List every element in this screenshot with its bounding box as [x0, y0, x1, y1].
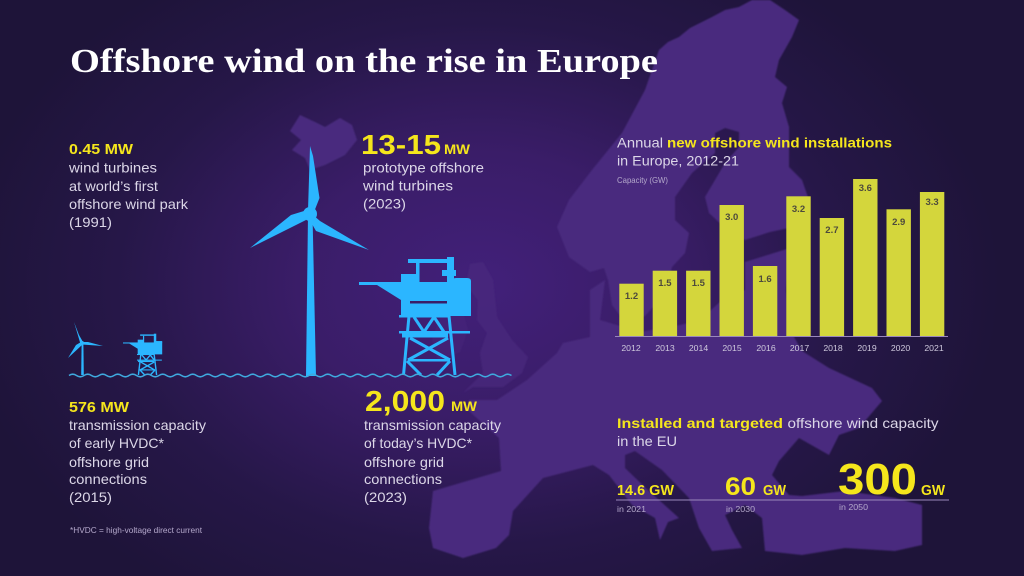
capacity figures: 300	[838, 455, 917, 504]
bar chart: 1.5	[692, 278, 706, 289]
bar chart: 2.7	[825, 225, 839, 236]
text block: 13-15 MW turbines	[361, 129, 484, 212]
icon: small platform	[123, 334, 162, 375]
capacity figures: GW	[763, 483, 786, 499]
capacity heading: offshore wind capacity	[788, 415, 938, 431]
bar chart: 2014	[689, 343, 708, 353]
map of Europe	[290, 0, 922, 558]
text block: 0.45 MW turbines: (1991)	[69, 214, 112, 230]
text block: 13-15 MW turbines: MW	[444, 142, 470, 157]
bar chart	[615, 179, 948, 353]
capacity figures: in 2050	[839, 502, 868, 512]
capacity heading: Installed and targeted	[617, 415, 783, 431]
text block: 576 MW: connections	[69, 471, 147, 487]
capacity figures: in 2021	[617, 504, 646, 514]
bar chart: 2018	[823, 343, 843, 353]
capacity heading: in the EU	[617, 433, 677, 449]
text block: 576 MW: 576 MW	[69, 400, 129, 416]
bar chart: 2017	[790, 343, 809, 353]
chart heading: new offshore wind installations	[667, 134, 892, 150]
bar chart: 1.6	[758, 274, 772, 285]
bar chart: 2021	[924, 343, 944, 353]
bar chart: 2.9	[892, 217, 905, 228]
text block: 2,000 MW: (2023)	[364, 489, 407, 505]
capacity figures: GW	[921, 483, 945, 499]
text block: 2,000 MW: MW	[451, 399, 477, 414]
bar chart: 1.5	[658, 278, 672, 289]
bar chart: 2013	[655, 343, 675, 353]
bar chart: 3.3	[925, 197, 939, 208]
capacity heading	[617, 415, 938, 449]
text block: 2,000 MW: transmission capacity	[364, 417, 501, 433]
text block: 13-15 MW turbines: (2023)	[363, 196, 406, 212]
bar chart: 2019	[857, 343, 877, 353]
text block: 13-15 MW turbines: prototype offshore	[363, 160, 484, 176]
bar chart: 3.2	[792, 204, 805, 215]
bar chart: 1.2	[625, 291, 638, 302]
text block: 576 MW: transmission capacity	[69, 417, 206, 433]
bar chart: 3.0	[725, 212, 738, 223]
chart heading: Capacity (GW)	[617, 175, 668, 185]
footnote: *HVDC = high-voltage direct current	[70, 525, 203, 535]
bar chart: 3.6	[859, 183, 872, 194]
bar chart: 2012	[621, 343, 641, 353]
icon: large turbine	[250, 146, 369, 376]
text block: 0.45 MW turbines: 0.45 MW	[69, 142, 133, 158]
text block: 2,000 MW: 2,000	[365, 386, 445, 418]
chart heading	[617, 134, 892, 185]
text block: 0.45 MW turbines: at world’s first	[69, 178, 158, 194]
text block: 0.45 MW turbines: offshore wind park	[69, 196, 189, 212]
text block: 2,000 MW: connections	[364, 471, 442, 487]
chart heading: Annual	[617, 134, 663, 150]
bar chart: 2016	[756, 343, 776, 353]
icon: small turbine	[68, 322, 103, 375]
text block: 0.45 MW turbines	[68, 142, 189, 230]
text block: 576 MW: (2015)	[69, 489, 112, 505]
text block: 576 MW: of early HVDC*	[69, 435, 165, 451]
capacity figures: in 2030	[726, 504, 755, 514]
chart heading: in Europe, 2012-21	[617, 152, 739, 168]
text block: 13-15 MW turbines: wind turbines	[362, 178, 453, 194]
text block: 13-15 MW turbines: 13-15	[361, 129, 441, 160]
bar chart: 2020	[891, 343, 910, 353]
text block: 2,000 MW: offshore grid	[364, 454, 444, 470]
capacity figures: 14.6 GW	[617, 483, 674, 499]
bar chart: 2015	[722, 343, 742, 353]
text block: 576 MW	[69, 400, 206, 505]
capacity figures	[616, 455, 949, 514]
icon: large platform	[359, 257, 471, 375]
wave line	[69, 374, 512, 377]
capacity figures: 60	[725, 473, 756, 501]
title: Offshore wind on the rise in Europe	[70, 43, 658, 80]
text block: 2,000 MW	[364, 386, 501, 505]
text block: 2,000 MW: of today’s HVDC*	[364, 435, 473, 451]
text block: 0.45 MW turbines: wind turbines	[68, 160, 157, 176]
text block: 576 MW: offshore grid	[69, 454, 149, 470]
